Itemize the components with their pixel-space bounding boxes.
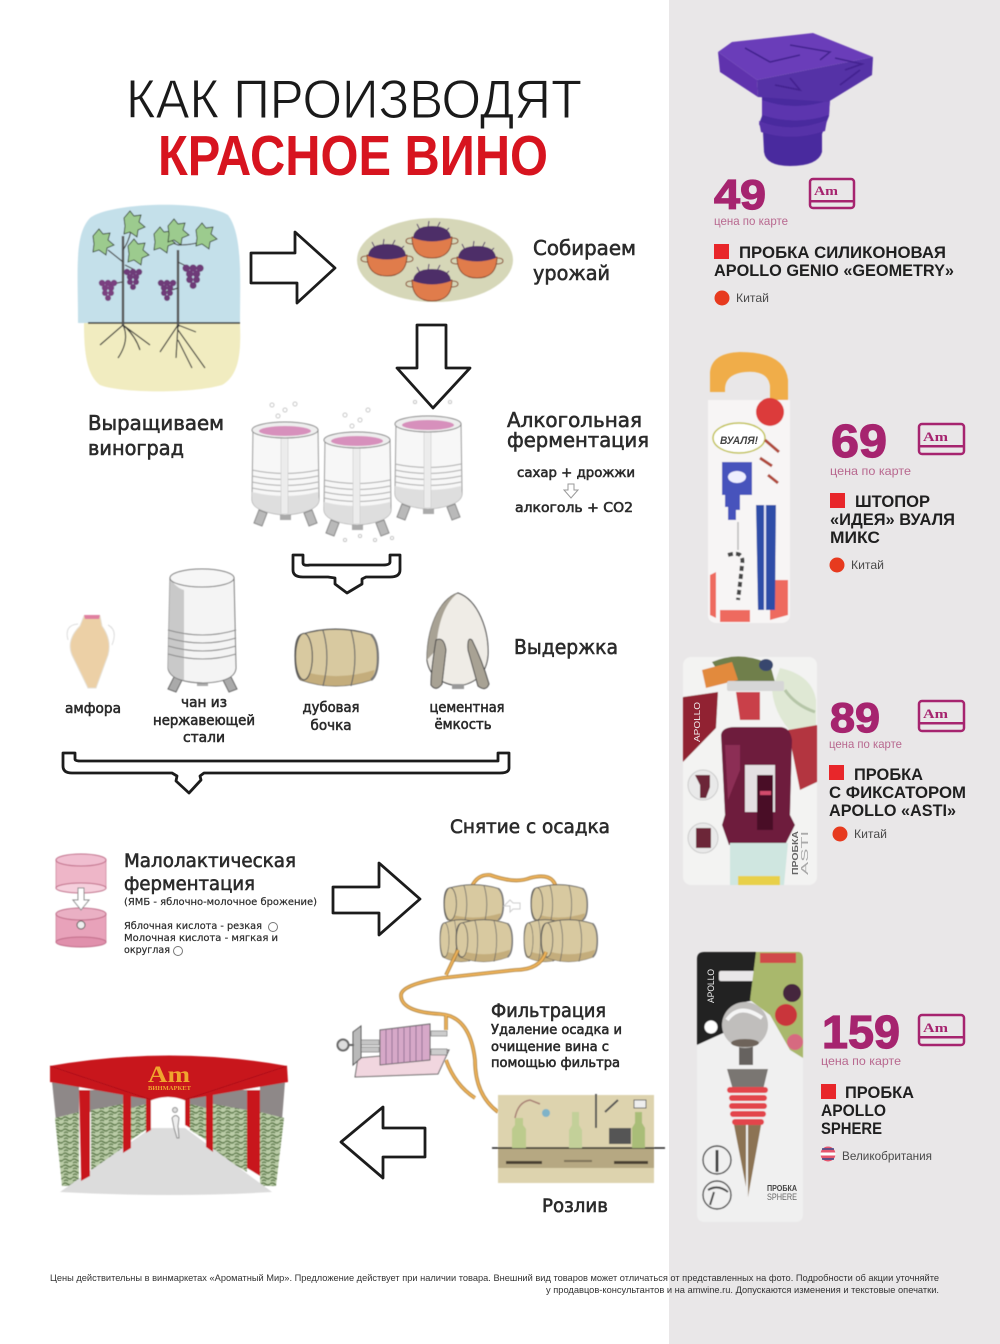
caption: цена по карте (714, 214, 788, 228)
icon: stacked barrels with tubes (440, 875, 597, 962)
product name: МИКС (830, 529, 880, 547)
origin: Китай (851, 558, 884, 572)
label: malolactic fermentation: ферментация (124, 873, 255, 895)
product 4: sphere stopper (697, 952, 964, 1222)
origin (830, 558, 884, 572)
title (126, 68, 582, 188)
product name: SPHERE (821, 1120, 882, 1138)
icon: fermentation tanks (252, 400, 462, 542)
icon: filter press (338, 1024, 449, 1077)
arrow: vines to harvest (251, 232, 335, 303)
bullet (829, 765, 844, 780)
label: vessel names: амфора (65, 701, 121, 717)
icon: loyalty card (810, 179, 854, 208)
icon: loyalty card: Am (923, 1020, 948, 1035)
origin (714, 290, 769, 306)
icon: vines illustration (78, 205, 240, 391)
bullet (821, 1084, 836, 1099)
arrow: harvest to fermentation (397, 325, 470, 408)
label: grow grapes: виноград (88, 436, 184, 460)
label: harvest: Собираем (533, 236, 636, 260)
arrow: aging to malolactic (63, 753, 509, 793)
product name (829, 766, 966, 820)
icon: Sphere package: SPHERE (767, 1192, 797, 1202)
label: malolactic fermentation: (ЯМБ - яблочно-молочное брожение) (124, 897, 317, 908)
icon: Asti package: ПРОБКА (791, 831, 800, 875)
icon: harvest pots (357, 218, 513, 302)
product name: ПРОБКА (845, 1084, 914, 1102)
product 1: silicone stopper (714, 33, 954, 306)
price: 49 (714, 171, 766, 218)
icon: corkscrew package: ВУАЛЯ! (720, 435, 758, 447)
label: vessel names: дубовая (302, 700, 360, 716)
label: malolactic fermentation (124, 850, 317, 956)
product name: ШТОПОР (855, 493, 930, 511)
arrow: malolactic to racking (333, 863, 420, 935)
label: alcoholic fermentation: алкоголь + CO2 (515, 500, 633, 516)
label: filtration: Удаление осадка и (491, 1022, 622, 1038)
caption: цена по карте (830, 464, 911, 478)
label: filtration: помощью фильтра (491, 1055, 620, 1071)
bullet (830, 493, 845, 508)
icon: wine market gallery (50, 1056, 288, 1195)
product name: APOLLO GENIO «GEOMETRY» (714, 262, 954, 280)
product name (830, 493, 955, 547)
label: aging: Выдержка (514, 635, 618, 659)
label: filtration: очищение вина с (491, 1039, 609, 1055)
product name: ПРОБКА (854, 766, 923, 784)
icon: Asti package: ASTI (800, 831, 811, 875)
product name: «ИДЕЯ» ВУАЛЯ (830, 511, 955, 529)
caption: цена по карте (829, 737, 902, 751)
caption: цена по карте (821, 1054, 901, 1068)
label: grow grapes: Выращиваем (88, 411, 224, 435)
icon: bottling line (492, 1094, 665, 1183)
label: alcoholic fermentation: сахар + дрожжи (517, 465, 635, 481)
label: malolactic fermentation: Яблочная кислота - резкая (124, 921, 262, 932)
label: vessel names: стали (183, 730, 225, 746)
footer note: у продавцов-консультантов и на amwine.ru. Допускаются изменения и текстовые опечатки. (546, 1285, 939, 1296)
icon: concrete tank (427, 593, 489, 689)
footer note (50, 1273, 939, 1296)
price: 159 (822, 1006, 900, 1058)
title: КРАСНОЕ ВИНО (158, 124, 548, 188)
label: vessel names: бочка (310, 718, 352, 734)
product 3: fixing stopper (683, 656, 966, 885)
icon: loyalty card: Am (923, 429, 948, 444)
label: vessel names (65, 695, 504, 746)
label: malolactic fermentation: округлая (124, 945, 170, 956)
label: alcoholic fermentation: ферментация (507, 428, 649, 452)
origin: Китай (854, 827, 887, 841)
icon: wine market gallery: ВИНМАРКЕТ (148, 1085, 192, 1092)
label: vessel names: ёмкость (434, 717, 492, 733)
icon: Sphere package: ПРОБКА (767, 1184, 797, 1193)
icon: Sphere package: APOLLO (706, 969, 716, 1003)
product 2: corkscrew (708, 352, 964, 623)
icon: oak barrel (295, 629, 378, 686)
icon: loyalty card: Am (923, 706, 948, 721)
footer note: Цены действительны в винмаркетах «Ароматный Мир». Предложение действует при наличии товара. Внешний вид товаров может отличаться от представленных на фото. Подробности об акции уточняйте (50, 1273, 939, 1284)
origin (832, 826, 887, 842)
label: bottling: Розлив (542, 1195, 608, 1217)
product name: APOLLO «ASTI» (829, 802, 956, 820)
product name (821, 1084, 914, 1138)
icon: purple stopper (718, 33, 873, 166)
origin: Великобритания (842, 1149, 932, 1163)
icon: steel tank (168, 569, 237, 692)
label: vessel names: чан из (181, 695, 227, 711)
bullet (714, 244, 729, 259)
icon: loyalty card (919, 1015, 964, 1045)
arrow: bottling to store (341, 1107, 425, 1178)
icon: Sphere package (697, 952, 803, 1222)
product name: ПРОБКА СИЛИКОНОВАЯ (739, 244, 946, 262)
icon: loyalty card: Am (814, 183, 838, 198)
icon: Asti package: APOLLO (693, 702, 702, 742)
icon: loyalty card (919, 701, 964, 731)
title: КАК ПРОИЗВОДЯТ (126, 68, 582, 130)
product name: APOLLO (821, 1102, 886, 1120)
label: racking: Снятие с осадка (450, 816, 610, 838)
product name: С ФИКСАТОРОМ (829, 784, 966, 802)
icon: malolactic jars (56, 854, 106, 947)
label: vessel names: нержавеющей (153, 713, 255, 729)
price: 69 (831, 415, 887, 467)
arrow: fermentation to aging (293, 555, 400, 593)
icon: amphora (67, 615, 114, 688)
icon: wine market gallery: Am (148, 1062, 190, 1087)
label: harvest (533, 236, 636, 285)
price: 89 (830, 694, 880, 741)
panel: right column (669, 0, 1000, 1344)
icon: loyalty card (919, 424, 964, 454)
label: grow grapes (88, 411, 224, 460)
label: harvest: урожай (533, 261, 610, 285)
label: malolactic fermentation: Малолактическая (124, 850, 296, 872)
icon: Asti package (683, 656, 817, 885)
label: filtration (491, 1000, 622, 1071)
label: vessel names: цементная (430, 700, 504, 716)
origin (820, 1146, 932, 1163)
origin: Китай (736, 291, 769, 305)
label: alcoholic fermentation (507, 408, 649, 516)
label: malolactic fermentation: Молочная кислота - мягкая и (124, 933, 278, 944)
icon: corkscrew package (708, 352, 790, 623)
label: alcoholic fermentation: Алкогольная (507, 408, 642, 432)
icon: tubing (401, 950, 546, 1112)
label: filtration: Фильтрация (491, 1000, 606, 1022)
product name (714, 244, 954, 280)
